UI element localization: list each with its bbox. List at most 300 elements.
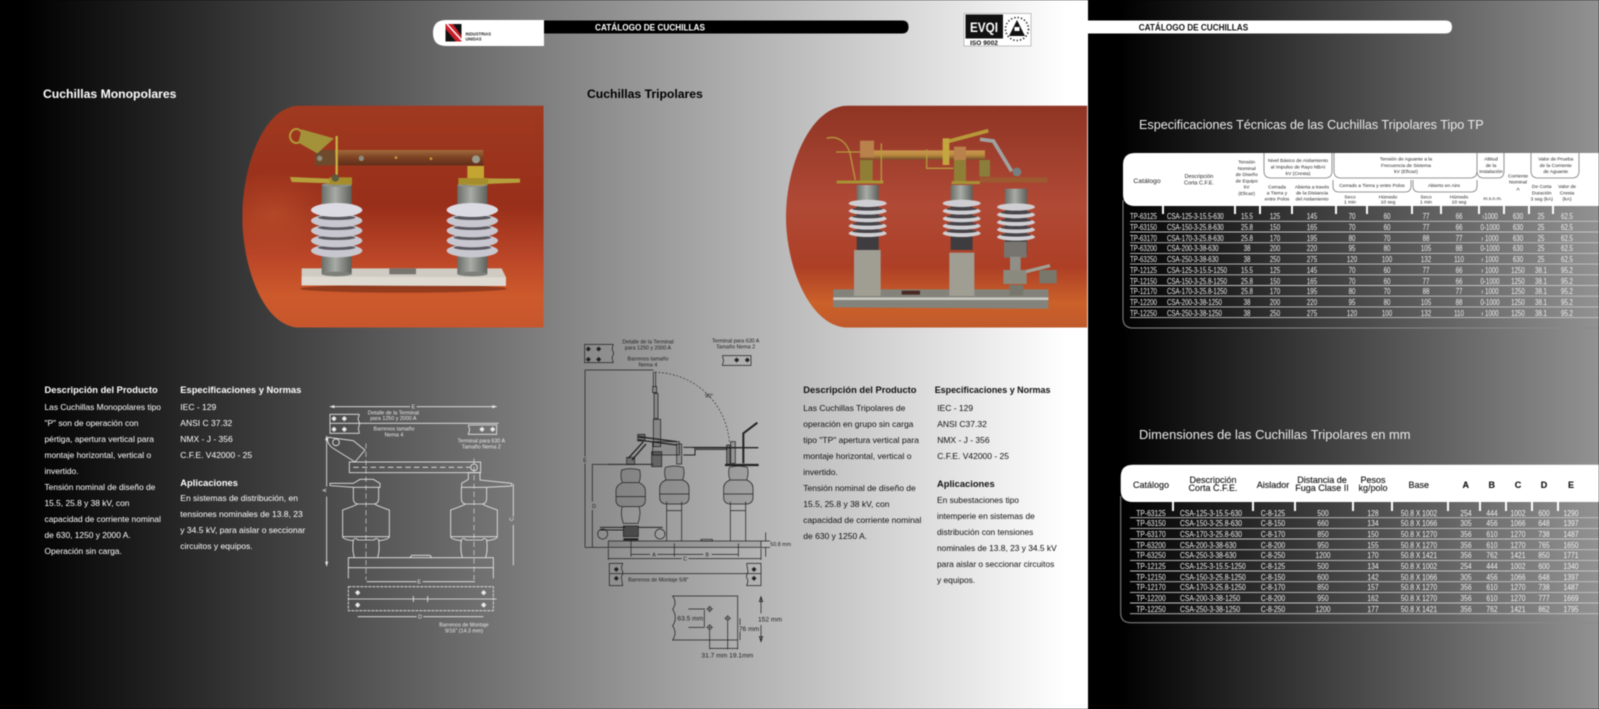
table body: technical specifications: CSA-250-3-38-630 (1167, 255, 1219, 264)
table body: technical specifications: 70 (1348, 266, 1355, 275)
body text: tripolar standards list (936, 402, 1010, 460)
table body: dimensions: 356 (1460, 605, 1471, 614)
header bar: catalogue title on right page (1088, 20, 1452, 34)
text block: monopolar applications (180, 478, 306, 552)
table body: technical specifications: TP-63250 (1130, 255, 1157, 264)
logo: Industrias Unidas tab: INDUSTRIAS (466, 32, 491, 36)
icon: ISO 9002 certification badge: ISO 9002 (970, 40, 998, 47)
table header: technical specifications: Nominal (1238, 166, 1256, 172)
table header: technical specifications: Cerrado a Tierra y entre Polos (1339, 183, 1405, 189)
table body: dimensions: 128 (1367, 508, 1379, 518)
table body: dimensions: 1200 (1316, 605, 1330, 614)
table body: technical specifications: TP-63170 (1130, 234, 1157, 243)
table body: dimensions: 610 (1486, 594, 1497, 603)
table body: dimensions: 765 (1538, 541, 1550, 550)
table body: dimensions: TP-12125 (1136, 562, 1165, 571)
body text: tripolar standards list: IEC - 129 (937, 402, 973, 412)
table body: dimensions: 1340 (1564, 562, 1578, 571)
subheading: Descripción del Producto: Descripción del Producto (44, 384, 158, 394)
table body: dimensions: C-8-200 (1261, 594, 1285, 603)
table header: technical specifications (1123, 153, 1599, 206)
table header: technical specifications: Frecuencia de Sistema (1381, 163, 1431, 169)
table body: dimensions: 610 (1486, 541, 1497, 550)
text block: monopolar product description (44, 384, 162, 556)
table header: dimensions: Aislador (1257, 480, 1289, 490)
table body: dimensions: 610 (1486, 530, 1497, 539)
table body: technical specifications: 25 (1537, 255, 1544, 264)
table body: dimensions: 356 (1460, 594, 1471, 603)
table body: technical specifications: 95.2 (1561, 277, 1573, 286)
table body: dimensions: 50.8 X 1002 (1401, 508, 1437, 518)
body text: tripolar description: Tensión nominal de diseño de (803, 483, 916, 493)
table body: technical specifications: TP-12150 (1130, 277, 1157, 286)
body text: tripolar applications: intemperie en sistemas de (937, 511, 1035, 521)
technical drawing: three-pole switch: Terminal para 630 A (712, 338, 760, 344)
table body: technical specifications: 105 (1421, 244, 1431, 253)
table body: dimensions: CSA-250-3-38-1250 (1180, 605, 1240, 614)
table body: dimensions: 305 (1460, 519, 1471, 528)
table body: dimensions: TP-63200 (1136, 541, 1165, 550)
table body: dimensions: 1270 (1511, 530, 1525, 539)
body text: tripolar applications: y equipos. (937, 575, 975, 585)
table header: technical specifications: al Impulso de Rayo NBAI (1271, 164, 1325, 170)
table header: technical specifications: Seco (1420, 194, 1432, 200)
logo: Industrias Unidas tab (433, 20, 544, 46)
body text: tripolar description (802, 403, 922, 542)
technical drawing: three-pole switch: 76 mm (739, 626, 760, 633)
body text: monopolar description: de 630, 1250 y 2000 A. (44, 530, 131, 540)
body text: tripolar description: 15.5, 25.8 y 38 kV, con (803, 499, 889, 509)
table body: technical specifications: 25.8 (1241, 277, 1253, 286)
body text: monopolar applications: y 34.5 kV, para aislar o seccionar (180, 525, 305, 535)
table body: technical specifications: 38 (1243, 244, 1250, 253)
table body: technical specifications: 70 (1384, 287, 1390, 296)
table header: technical specifications: 10 seg (1381, 200, 1396, 206)
table body: dimensions: 50.8 X 1066 (1401, 519, 1437, 528)
table body: technical specifications: 630 (1513, 244, 1523, 253)
table header: technical specifications: m.s.n.m. (1483, 197, 1502, 202)
table body: technical specifications: › 1000 (1481, 255, 1499, 264)
body text: monopolar description: capacidad de corriente nominal (44, 514, 161, 524)
table header: technical specifications: Húmedo (1450, 194, 1469, 200)
table body: dimensions: 777 (1538, 594, 1550, 603)
table header: technical specifications: A (1516, 186, 1520, 192)
technical drawing: single-pole switch: para 1250 y 2000 A (370, 416, 417, 422)
heading: dimensions table: Dimensiones de las Cuchillas Tripolares en mm (1139, 426, 1411, 442)
table body: dimensions: 950 (1317, 541, 1329, 550)
subheading: Especificaciones y Normas: Especificaciones y Normas (935, 384, 1050, 394)
table body: dimensions: 150 (1367, 530, 1379, 539)
table body: technical specifications: 66 (1456, 212, 1462, 221)
table body: technical specifications: 195 (1307, 287, 1317, 296)
table body: dimensions: 738 (1538, 583, 1550, 592)
table body: technical specifications: CSA-250-3-38-1250 (1167, 309, 1222, 318)
table body: technical specifications: 150 (1270, 277, 1280, 286)
table body: technical specifications: TP-63200 (1130, 244, 1157, 253)
body text: monopolar description: montaje horizontal, vertical o (44, 450, 151, 460)
body text: monopolar applications (180, 493, 306, 552)
table body: technical specifications: 38 (1243, 309, 1250, 318)
table body: technical specifications: 0-1000 (1480, 277, 1500, 286)
technical drawing: three-pole switch: 90° (705, 393, 713, 399)
table body: technical specifications: TP-12170 (1130, 287, 1157, 296)
table body: dimensions: 356 (1460, 551, 1471, 560)
table body: dimensions: C-8-250 (1261, 551, 1285, 560)
table body: technical specifications: 66 (1456, 277, 1462, 286)
body text: monopolar description: invertido. (44, 466, 78, 476)
table body: dimensions: 1650 (1564, 541, 1578, 550)
table body: technical specifications: › 1000 (1481, 266, 1499, 275)
table header: technical specifications: de Equipo (1236, 178, 1258, 184)
table body: dimensions: TP-12170 (1136, 583, 1165, 592)
icon: ISO 9002 certification badge (964, 14, 1031, 47)
table body: technical specifications: TP-12125 (1130, 266, 1157, 275)
table header: technical specifications: Cresta (1560, 190, 1574, 196)
table header: dimensions: Distancia de (1297, 475, 1347, 485)
table body: technical specifications: 66 (1456, 223, 1462, 232)
table header: technical specifications: Seco (1344, 194, 1356, 200)
table body: dimensions: 444 (1486, 508, 1497, 518)
body text: monopolar standards list: NMX - J - 356 (180, 434, 233, 444)
table body: technical specifications: 80 (1384, 244, 1390, 253)
table body: technical specifications: 200 (1270, 244, 1280, 253)
table body: technical specifications: CSA-150-3-25.8-630 (1167, 223, 1224, 232)
table header: dimensions: Base (1408, 480, 1429, 490)
body text: tripolar description: montaje horizontal, vertical o (803, 451, 912, 461)
table body: dimensions: 1066 (1511, 519, 1525, 528)
table header: technical specifications: Descripción (1185, 174, 1213, 180)
table header: dimensions: E (1568, 480, 1574, 490)
table body: technical specifications: 100 (1382, 309, 1392, 318)
table body: dimensions: C-8-125 (1261, 508, 1285, 518)
table header: technical specifications: Cerrada (1268, 184, 1286, 190)
table body: technical specifications: 38.1 (1535, 309, 1547, 318)
table body: technical specifications: 25 (1537, 223, 1544, 232)
table body: technical specifications: 220 (1307, 244, 1317, 253)
table body: dimensions: 254 (1460, 508, 1471, 518)
table body: technical specifications: 0-1000 (1480, 298, 1500, 307)
table body: technical specifications: 38.1 (1535, 287, 1547, 296)
technical drawing: three-pole switch: A (652, 552, 656, 558)
body text: monopolar description: pértiga, apertura vertical para (44, 434, 154, 444)
technical drawing: single-pole switch: E (412, 405, 416, 411)
table body: dimensions: TP-63250 (1136, 551, 1165, 560)
table header: dimensions: D (1541, 480, 1548, 490)
technical drawing: three-pole switch: Detalle de la Terminal (622, 340, 674, 346)
table body: dimensions: 177 (1367, 605, 1379, 614)
table body: dimensions: 134 (1367, 562, 1379, 571)
body text: monopolar applications: tensiones nominales de 13.8, 23 (180, 509, 303, 519)
table header: technical specifications: de Aguante (1543, 169, 1568, 175)
table header: technical specifications: kV (Eficaz) (1394, 169, 1418, 175)
body text: tripolar standards list: ANSI C37.32 (937, 418, 987, 428)
header bar: catalogue title on left page (544, 20, 908, 34)
table body: dimensions: C-8-170 (1261, 583, 1285, 592)
table body: technical specifications: 77 (1423, 223, 1429, 232)
table header: technical specifications: Catálogo (1133, 178, 1161, 185)
table body: technical specifications: 38.1 (1535, 266, 1547, 275)
table body: technical specifications: 25.8 (1241, 287, 1253, 296)
table body: technical specifications: ›1000 (1482, 212, 1498, 221)
table body: technical specifications: 88 (1423, 234, 1429, 243)
heading: Cuchillas Monopolares: Cuchillas Monopolares (43, 87, 176, 101)
table body: dimensions: 50.8 X 1002 (1401, 562, 1437, 571)
table body: technical specifications: 1250 (1511, 309, 1525, 318)
table body: technical specifications: 150 (1270, 223, 1280, 232)
table header: technical specifications: (kA) (1563, 196, 1572, 202)
table body: dimensions: 254 (1460, 562, 1471, 571)
table body: technical specifications: TP-63150 (1130, 223, 1157, 232)
table header: dimensions: Corta C.F.E. (1188, 483, 1238, 493)
technical drawing: three-pole switch: B (706, 552, 710, 558)
technical drawing: single-pole switch: E (418, 580, 422, 586)
table header: dimensions: Fuga Clase II (1295, 483, 1349, 493)
table body: technical specifications: 170 (1270, 287, 1280, 296)
body text: monopolar standards list (180, 402, 252, 460)
background: right dark specification page gradient (1088, 0, 1599, 709)
technical drawing: single-pole switch: Barrenos de Montaje (439, 622, 489, 628)
table header: technical specifications: Tensión de Aguante a la (1380, 156, 1432, 162)
table body: dimensions: 456 (1486, 573, 1497, 582)
table body: technical specifications: 1250 (1511, 298, 1525, 307)
table body: technical specifications: 62.5 (1561, 223, 1573, 232)
subheading: Aplicaciones: Aplicaciones (180, 478, 238, 488)
table header: technical specifications: De Corta (1532, 184, 1552, 190)
table body: dimensions: C-8-200 (1261, 541, 1285, 550)
table frame and row rules: technical specifications (1123, 200, 1599, 328)
body text: tripolar description: capacidad de corriente nominal (803, 515, 921, 525)
table header: dimensions: A (1462, 480, 1469, 490)
table header: technical specifications: de Diseño (1236, 172, 1258, 178)
table body: dimensions: C-8-170 (1261, 530, 1285, 539)
table body: dimensions (1136, 508, 1579, 614)
table body: dimensions: 762 (1486, 551, 1497, 560)
heading: Cuchillas Tripolares: Cuchillas Tripolares (587, 87, 703, 101)
table body: dimensions: 1421 (1511, 605, 1525, 614)
heading: technical specifications table: Especificaciones Técnicas de las Cuchillas Tripolares Tipo TP (1139, 118, 1484, 132)
technical drawing: three-pole switch: Barrenos de Montaje 5/8" (628, 578, 689, 584)
table header: technical specifications: Abierta a través (1295, 184, 1330, 190)
body text: tripolar applications: En subestaciones tipo (937, 495, 1019, 505)
table body: dimensions: 50.8 X 1270 (1401, 594, 1437, 603)
technical drawing: three-pole switch: 63.5 mm (677, 616, 704, 623)
table frame and row rules: dimensions (1121, 496, 1599, 623)
table header: technical specifications: Húmedo (1379, 194, 1398, 200)
table header: technical specifications: Abierto en Aire (1428, 183, 1460, 189)
table body: technical specifications: 70 (1384, 234, 1390, 243)
table body: technical specifications: 1250 (1511, 287, 1525, 296)
table body: technical specifications: 110 (1454, 309, 1464, 318)
table body: dimensions: 1002 (1511, 508, 1525, 518)
photo: three-pole disconnect switch (783, 103, 1090, 330)
table body: dimensions: 1669 (1564, 594, 1578, 603)
table body: technical specifications: 60 (1384, 277, 1390, 286)
table header: dimensions: kg/polo (1358, 483, 1388, 493)
table body: technical specifications: CSA-200-3-38-630 (1167, 244, 1219, 253)
table header: technical specifications: Corriente (1508, 174, 1528, 180)
table body: technical specifications: 66 (1456, 266, 1462, 275)
table body: dimensions: 1200 (1316, 551, 1330, 560)
table body: technical specifications: 200 (1270, 298, 1280, 307)
technical drawing: single-pole switch: 9/16" (14.3 mm) (445, 629, 483, 635)
technical drawing: three-pole switch: 152 mm (758, 616, 782, 623)
table body: dimensions: 170 (1367, 551, 1379, 560)
body text: tripolar standards list: NMX - J - 356 (937, 434, 990, 444)
table body: dimensions: 50.8 X 1270 (1401, 530, 1437, 539)
table header: technical specifications: Altitud (1484, 156, 1498, 162)
table body: technical specifications: CSA-150-3-25.8-1250 (1167, 277, 1227, 286)
text block: tripolar applications (936, 479, 1058, 586)
body text: monopolar description (44, 402, 162, 556)
table body: dimensions: 142 (1367, 573, 1379, 582)
table body: dimensions: 1002 (1511, 562, 1525, 571)
table body: technical specifications: 60 (1384, 223, 1390, 232)
technical drawing: three-pole switch: para 1250 y 2000 A (625, 346, 672, 352)
table body: technical specifications: 62.5 (1561, 234, 1573, 243)
table body: dimensions: 134 (1367, 519, 1379, 528)
body text: tripolar applications: para aislar o seccionar circuitos (937, 559, 1054, 569)
table header: technical specifications: Valor de (1558, 184, 1576, 190)
table body: technical specifications: 220 (1307, 298, 1317, 307)
table body: dimensions: 500 (1317, 562, 1329, 571)
table body: technical specifications: 132 (1421, 309, 1431, 318)
technical drawing: three-pole switch: Barrenos tamaño (628, 357, 668, 363)
table body: technical specifications: 125 (1270, 212, 1280, 221)
body text: tripolar applications: nominales de 13.8, 23 y 34.5 kV (937, 543, 1057, 553)
table body: dimensions: 648 (1538, 573, 1550, 582)
table body: technical specifications: 80 (1384, 298, 1390, 307)
body text: tripolar description: invertido. (803, 467, 838, 477)
header bar: catalogue title on right page: CATÁLOGO DE CUCHILLAS (1139, 22, 1248, 32)
table body: dimensions: CSA-200-3-38-630 (1180, 541, 1236, 550)
header bar: catalogue title on left page: CATÁLOGO DE CUCHILLAS (595, 22, 705, 32)
technical drawing: single-pole switch: A (323, 488, 329, 492)
table header: technical specifications: Duración (1532, 190, 1552, 196)
table header: technical specifications: Nominal (1509, 180, 1527, 186)
body text: monopolar description: "P" son de operación con (44, 418, 138, 428)
body text: monopolar applications: circuitos y equipos. (180, 541, 253, 551)
table body: dimensions: CSA-170-3-25.8-1250 (1180, 583, 1246, 592)
table header: dimensions: Pesos (1360, 475, 1386, 485)
table body: dimensions: 356 (1460, 541, 1471, 550)
table body: dimensions: 600 (1538, 508, 1550, 518)
table body: dimensions: 738 (1538, 530, 1550, 539)
table header: dimensions: B (1488, 480, 1495, 490)
table body: technical specifications: 1250 (1511, 266, 1525, 275)
table body: dimensions: C-8-250 (1261, 605, 1285, 614)
table body: technical specifications: 25 (1537, 212, 1544, 221)
table body: technical specifications: CSA-200-3-38-1250 (1167, 298, 1222, 307)
technical drawing: single-pole switch: Tamaño Nema 2 (462, 445, 501, 451)
table body: dimensions: 444 (1486, 562, 1497, 571)
table body: technical specifications: 132 (1421, 255, 1431, 264)
table header: technical specifications: del Aislamiento (1296, 196, 1329, 202)
technical drawing: three-pole switch: Tamaño Nema 2 (716, 344, 755, 350)
table body: dimensions: 862 (1538, 605, 1550, 614)
table body: dimensions: 1290 (1564, 508, 1578, 518)
table body: technical specifications: 62.5 (1561, 212, 1573, 221)
body text: tripolar standards list: C.F.E. V42000 - 25 (937, 450, 1009, 460)
table body: technical specifications: 165 (1307, 223, 1317, 232)
table body: technical specifications: 105 (1421, 298, 1431, 307)
table body: technical specifications: 80 (1348, 234, 1355, 243)
table body: technical specifications: 195 (1307, 234, 1317, 243)
table body: dimensions: 456 (1486, 519, 1497, 528)
table body: dimensions: 648 (1538, 519, 1550, 528)
table body: technical specifications: 95 (1348, 298, 1355, 307)
body text: tripolar applications: distribución con tensiones (937, 527, 1033, 537)
text block: monopolar standards (180, 384, 302, 460)
table body: technical specifications: 100 (1382, 255, 1392, 264)
technical drawing: three-pole switch: Nema 4 (639, 362, 657, 368)
table body: technical specifications: CSA-125-3-15.5-1250 (1167, 266, 1227, 275)
table body: technical specifications: 95.2 (1561, 309, 1573, 318)
table body: technical specifications: 95.2 (1561, 266, 1573, 275)
table body: dimensions: CSA-170-3-25.8-630 (1180, 530, 1242, 539)
table body: technical specifications: 25.8 (1241, 223, 1253, 232)
table body: technical specifications: 110 (1454, 255, 1464, 264)
body text: monopolar standards list: ANSI C 37.32 (180, 418, 232, 428)
table body: dimensions: C-8-150 (1261, 573, 1285, 582)
table body: technical specifications: 145 (1307, 212, 1317, 221)
table header: technical specifications: Tensión (1238, 160, 1255, 166)
table body: technical specifications: 88 (1423, 287, 1429, 296)
body text: tripolar description: operación en grupo sin carga (803, 419, 913, 429)
table body: technical specifications: 80 (1348, 287, 1355, 296)
table body: dimensions: 1270 (1511, 541, 1525, 550)
technical drawing: three-pole switch: 50.8 mm (770, 542, 792, 548)
table body: dimensions: 660 (1317, 519, 1329, 528)
table body: dimensions: TP-63125 (1136, 508, 1165, 518)
table header: technical specifications: 10 seg (1452, 200, 1467, 206)
table body: dimensions: 356 (1460, 530, 1471, 539)
table body: dimensions: TP-63170 (1136, 530, 1165, 539)
table body: technical specifications: 145 (1307, 266, 1317, 275)
table body: technical specifications: 250 (1270, 309, 1280, 318)
table body: technical specifications: 630 (1513, 223, 1523, 232)
table body: dimensions: 356 (1460, 583, 1471, 592)
body text: monopolar standards list: IEC - 129 (180, 402, 216, 412)
technical drawing: single-pole switch: D (418, 614, 422, 620)
table body: dimensions: 1795 (1564, 605, 1578, 614)
table header: technical specifications: kV (1244, 185, 1250, 191)
table header: dimensions: C (1515, 480, 1522, 490)
photo: single-pole disconnect switch (242, 105, 544, 328)
table body: technical specifications: 165 (1307, 277, 1317, 286)
table body: technical specifications: › 1000 (1481, 234, 1499, 243)
table body: dimensions: CSA-125-3-15.5-630 (1180, 508, 1242, 518)
table body: dimensions: 950 (1317, 594, 1329, 603)
table body: technical specifications: 77 (1423, 212, 1429, 221)
table body: dimensions: 155 (1367, 541, 1379, 550)
text block: tripolar product description (802, 385, 922, 542)
table body: dimensions: 850 (1317, 530, 1329, 539)
table body: technical specifications: 15.5 (1241, 212, 1253, 221)
table header: technical specifications: de la (1486, 163, 1497, 169)
table body: dimensions: 1270 (1511, 583, 1525, 592)
technical drawing: three-pole switch (583, 338, 792, 659)
table body: dimensions: CSA-150-3-25.8-630 (1180, 519, 1242, 528)
table body: dimensions: C-8-150 (1261, 519, 1285, 528)
table body: technical specifications: 62.5 (1561, 255, 1573, 264)
table header: technical specifications: de la Corriente (1540, 163, 1572, 169)
table body: dimensions: TP-12200 (1136, 594, 1165, 603)
subheading: Especificaciones y Normas: Especificaciones y Normas (180, 384, 301, 394)
table header: technical specifications: 1 min (1420, 200, 1432, 206)
table body: technical specifications: 630 (1513, 234, 1523, 243)
body text: tripolar description: Las Cuchillas Tripolares de (803, 403, 905, 413)
logo: Industrias Unidas tab: UNIDAS (466, 36, 482, 42)
